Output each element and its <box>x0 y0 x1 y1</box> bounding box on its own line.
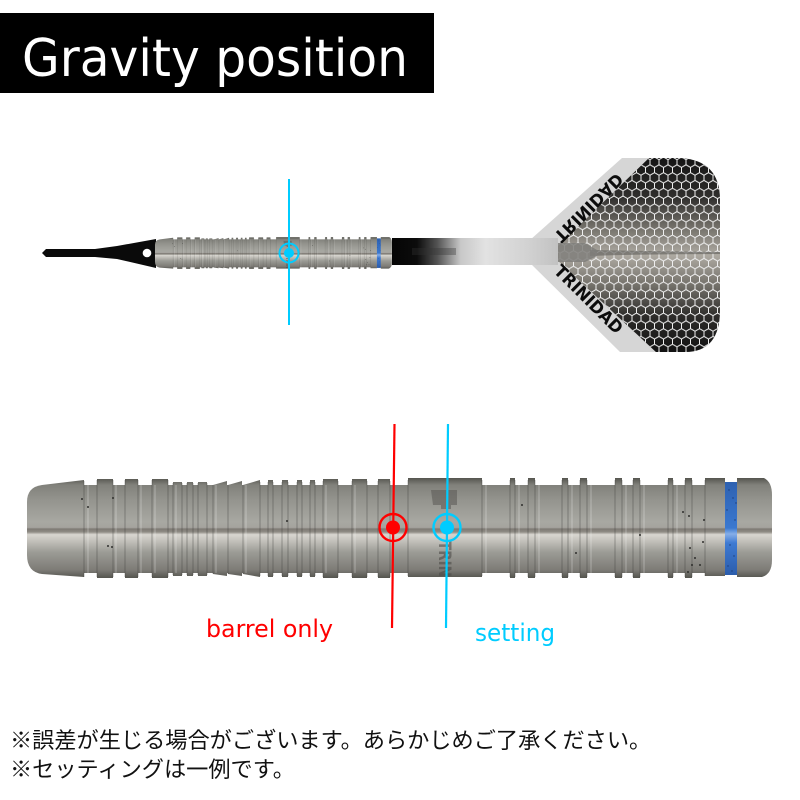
note <box>10 727 651 782</box>
barrel ring <box>725 482 737 575</box>
small barrel <box>155 237 392 269</box>
barrel core <box>60 485 750 573</box>
barrel ridges <box>97 478 725 578</box>
note: ※誤差が生じる場合がございます。あらかじめご了承ください。 <box>10 727 651 753</box>
label: setting: setting <box>475 619 555 647</box>
label: barrel only: barrel only <box>206 615 333 643</box>
shaft collar <box>558 243 597 262</box>
flight <box>530 157 725 353</box>
barrel rear end <box>737 478 772 577</box>
barrel speckles <box>82 498 704 572</box>
tip hole <box>143 249 151 257</box>
title: Gravity position <box>22 29 408 89</box>
barrel only marker <box>380 424 406 628</box>
barrel point end <box>27 480 84 577</box>
small dart setting marker <box>280 179 298 325</box>
shaft slot <box>412 248 456 255</box>
full dart <box>42 157 725 353</box>
setting marker <box>434 424 460 628</box>
ring speckles <box>727 490 736 571</box>
enlarged barrel <box>27 478 772 578</box>
flight logo upper: TRINIDAD <box>549 169 627 246</box>
flight base <box>530 158 720 352</box>
honeycomb print <box>557 157 725 353</box>
shaft <box>392 238 597 265</box>
flight spine <box>590 250 720 256</box>
engraved crown <box>431 490 457 509</box>
flight logo lower: TRINIDAD <box>549 261 627 338</box>
barrel groove shading <box>84 480 705 577</box>
tip <box>42 239 156 268</box>
note: ※セッティングは一例です。 <box>10 757 295 782</box>
barrel groove highlights <box>88 485 677 573</box>
engraved logo: TRIN <box>434 541 454 577</box>
